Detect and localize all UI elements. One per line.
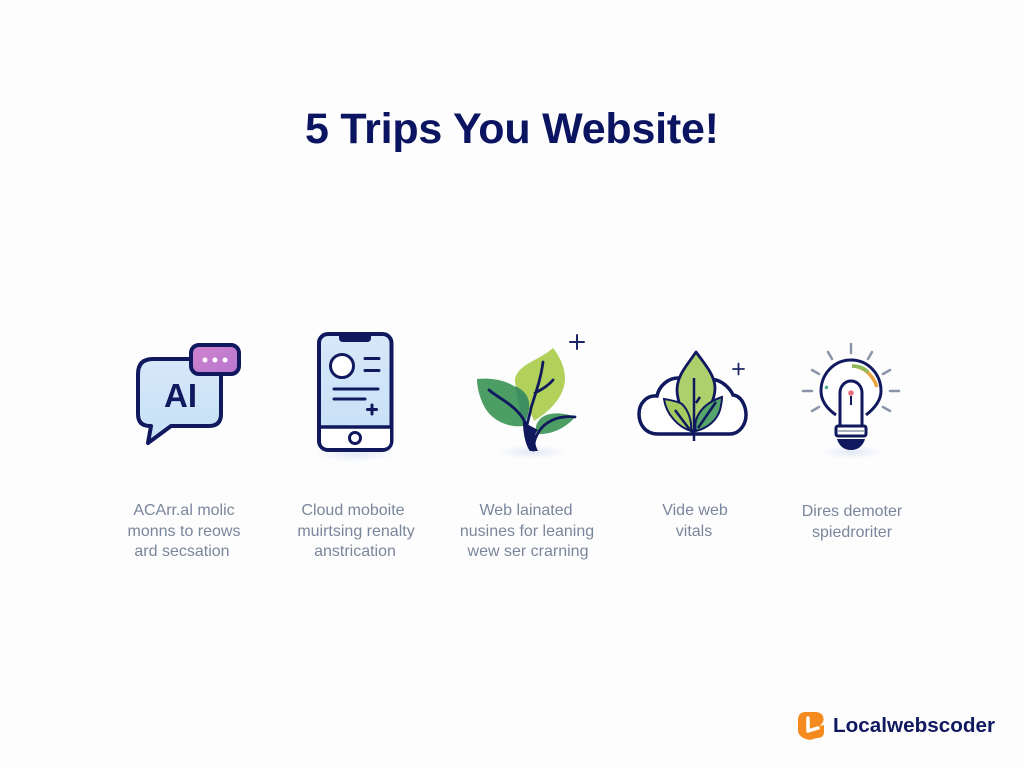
caption 4: Vide web xyxy=(662,502,728,519)
icon: cloud with leaves xyxy=(639,352,746,441)
caption 1: ACArr.al molic xyxy=(133,502,235,519)
caption 2: muirtsing renalty xyxy=(297,523,415,540)
caption 3: wew ser crarning xyxy=(467,543,588,560)
icon: mobile phone xyxy=(313,334,397,462)
title: 5 Trips You Website! xyxy=(305,105,719,153)
caption 2: Cloud moboite xyxy=(301,502,405,519)
caption 1: ard secsation xyxy=(134,543,230,560)
caption 2: anstrication xyxy=(314,543,396,560)
icon: AI chat bubble xyxy=(138,345,239,443)
icon: AI chat bubble: AI xyxy=(164,377,197,414)
caption 1: monns to reows xyxy=(128,523,240,540)
icon: leafy sprout xyxy=(477,335,584,459)
logo: Localwebscoder: Localwebscoder xyxy=(833,715,995,737)
logo: Localwebscoder xyxy=(798,712,995,740)
caption 3: nusines for leaning xyxy=(460,523,594,540)
caption 3 xyxy=(460,502,594,560)
caption 3: Web lainated xyxy=(479,502,573,519)
caption 4: vitals xyxy=(676,523,712,540)
caption 5 xyxy=(802,503,903,541)
caption 1 xyxy=(128,502,240,560)
icon: light bulb speedometer xyxy=(803,344,899,459)
caption 4 xyxy=(662,502,728,540)
caption 5: Dires demoter xyxy=(802,503,903,520)
icon: plus sparkle xyxy=(570,335,584,349)
caption 2 xyxy=(297,502,415,560)
caption 5: spiedroriter xyxy=(812,524,893,541)
